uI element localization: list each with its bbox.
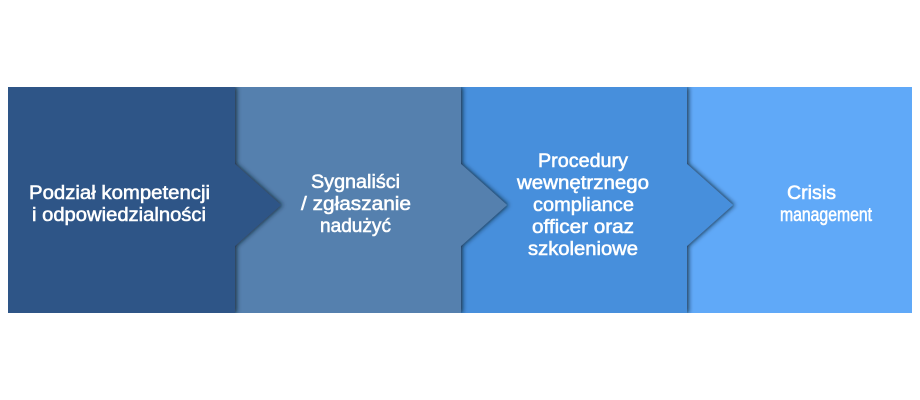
panel: Procedury wewnętrznego — [461, 87, 733, 313]
label: Podział kompetencji i odpowiedzialności — [29, 183, 210, 226]
panel: Podział kompetencji — [8, 87, 281, 313]
label: Podział kompetencji i odpowiedzialności: Podział kompetencji — [29, 183, 210, 204]
panel: Crisis management — [687, 87, 912, 313]
label: Sygnaliści / zgłaszanie nadużyć: Sygnaliści — [311, 172, 400, 193]
label: Podział kompetencji i odpowiedzialności: i odpowiedzialności — [32, 205, 206, 226]
panel: Sygnaliści — [235, 87, 507, 313]
label: Crisis management: Crisis — [787, 183, 836, 204]
label: Procedury wewnętrznego compliance officer oraz szkoleniowe — [516, 151, 649, 260]
label: Procedury wewnętrznego compliance officer oraz szkoleniowe: szkoleniowe — [528, 239, 638, 260]
label: Sygnaliści / zgłaszanie nadużyć — [301, 172, 411, 237]
infographic: four-step chevron process — [8, 87, 912, 313]
label: Procedury wewnętrznego compliance officer oraz szkoleniowe: Procedury — [538, 151, 629, 172]
label: Crisis management: management — [780, 205, 873, 226]
label: Sygnaliści / zgłaszanie nadużyć: / zgłaszanie — [301, 194, 411, 215]
label: Procedury wewnętrznego compliance officer oraz szkoleniowe: wewnętrznego — [516, 173, 649, 194]
label: Crisis management — [780, 183, 873, 226]
label: Procedury wewnętrznego compliance officer oraz szkoleniowe: compliance — [533, 195, 634, 216]
label: Sygnaliści / zgłaszanie nadużyć: nadużyć — [320, 216, 391, 237]
label: Procedury wewnętrznego compliance officer oraz szkoleniowe: officer oraz — [532, 217, 634, 238]
